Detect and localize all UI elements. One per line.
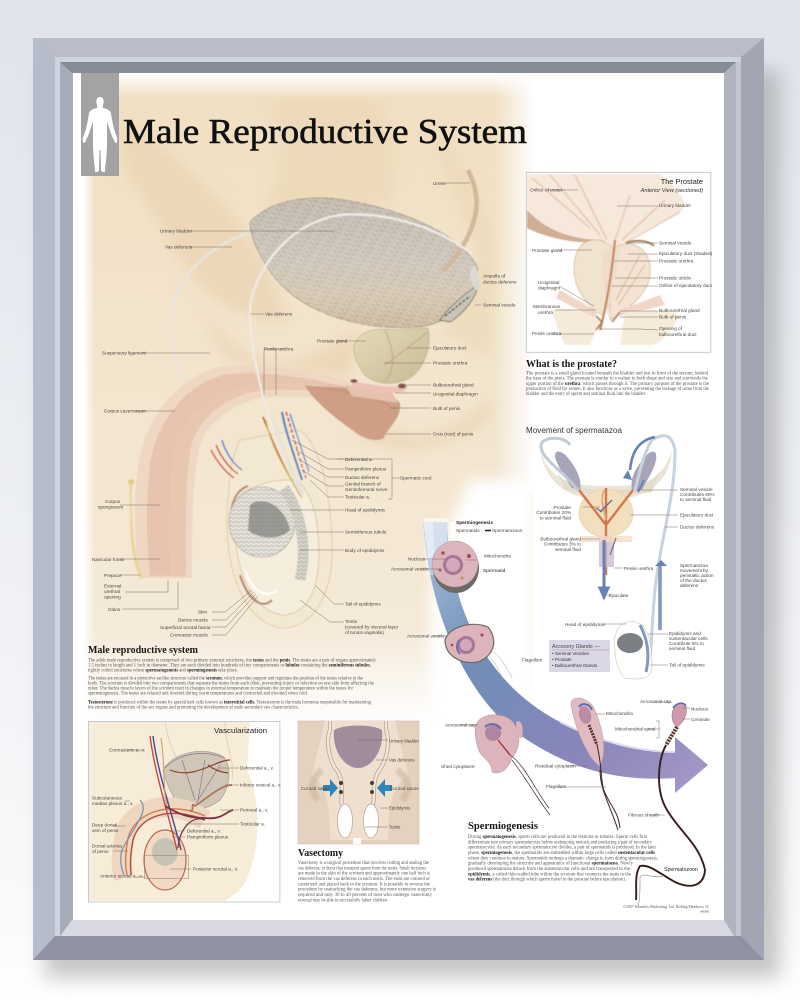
sperm cell labels: Residual cytoplasm bbox=[535, 764, 576, 768]
vascular labels bbox=[92, 726, 281, 878]
anatomy labels: Superficial scrotal fascia bbox=[160, 625, 211, 630]
text block: what is the prostate: the base of the penis. The prostate is similar to a walnut in both shape and size and surrounds the bbox=[526, 376, 708, 382]
prostate labels: Membranous bbox=[533, 304, 561, 309]
anatomy labels: Spermatic cord bbox=[400, 476, 432, 480]
text block: vasectomy: procedure by reattaching the vas deferens, but more extensive surgery is bbox=[298, 888, 436, 893]
vascular labels: Anterior scrotal a., v. bbox=[100, 874, 143, 878]
bulb of penis bbox=[305, 386, 400, 440]
panel: vasectomy diagram: Cut and suture bbox=[390, 786, 419, 791]
anatomy labels: (covered by visceral layer bbox=[345, 624, 399, 630]
movement labels: sustentacular cells bbox=[669, 636, 708, 641]
movement labels: to seminal fluid bbox=[540, 516, 571, 520]
callout: accessory glands: • Bulbourethral Glands bbox=[552, 663, 598, 668]
vascular labels: Perineal a., v. bbox=[240, 808, 268, 812]
movement labels: movement by bbox=[680, 568, 709, 573]
movement labels: Prostate bbox=[554, 505, 571, 510]
anatomy labels: Genitofemoral nerve bbox=[345, 487, 388, 492]
anatomy labels: Urogenital diaphragm bbox=[433, 392, 478, 396]
text block: vasectomy: removed from the vas deferens in each testis. The ends are cutured or bbox=[298, 877, 430, 882]
anatomy labels: Corpus bbox=[105, 499, 121, 504]
text block: spermiogenesis: During spermatogenesis, sperm cells are produced in the testicles or tubules. Sperm cells first bbox=[468, 835, 648, 840]
testis bbox=[615, 622, 652, 679]
prostate labels bbox=[530, 177, 713, 337]
prostate labels: bulbourethral duct bbox=[659, 332, 697, 337]
movement labels: Spermatozoa bbox=[680, 563, 708, 568]
testes bbox=[338, 804, 352, 838]
vasectomy labels bbox=[358, 740, 388, 827]
heading: spermiogenesis: Spermiogenesis bbox=[468, 820, 539, 832]
text block: male reproductive system: tightly coiled structures where spermatogenesis and spermiogenesis take place. bbox=[88, 668, 238, 674]
prostate gland bbox=[354, 328, 429, 383]
anatomy labels: Vas deferens bbox=[165, 244, 193, 250]
sperm cell labels: Spermatid bbox=[483, 568, 506, 574]
vascular labels: Posterior scrotal a., v. bbox=[193, 866, 238, 872]
arrow: spermiogenesis progression bbox=[423, 518, 708, 793]
anatomy labels: Cremaster muscle bbox=[170, 632, 208, 638]
credit: 96300 bbox=[701, 910, 709, 914]
text block: male reproductive system: Testosterone is produced within the testes by specialized cells known as interstitial cells. Testosterone is the male hormone responsible for maintaining bbox=[88, 700, 372, 706]
anatomy labels: Ureter bbox=[433, 181, 446, 186]
prostate labels: Orifice of ejaculatory duct bbox=[659, 283, 713, 288]
prostate labels: Urinary bladder bbox=[659, 203, 691, 208]
vascular labels: Cremasteric a., v. bbox=[109, 748, 145, 752]
anatomy labels: Ductus deferens bbox=[345, 475, 380, 480]
vas deferens crossing bladder bbox=[250, 214, 472, 462]
text block: what is the prostate: bladder and the entry of sperm and seminal fluid into the bladder. bbox=[526, 392, 646, 397]
prostate labels: Prostate gland bbox=[532, 248, 563, 253]
movement leader lines bbox=[582, 490, 678, 665]
text block: spermiogenesis: vas deferens (the duct through which sperm travel to the prostate before ejaculation). bbox=[468, 878, 626, 883]
urinary bladder bbox=[250, 198, 478, 328]
epididymis bbox=[284, 488, 303, 580]
text block: spermiogenesis bbox=[468, 835, 658, 883]
panel: vasectomy diagram: Urinary bladder bbox=[389, 738, 420, 744]
movement labels: Penile urethra bbox=[624, 566, 654, 571]
panel: vasectomy diagram: Testis bbox=[389, 824, 401, 830]
panel: vasectomy diagram: Vas deferens bbox=[389, 758, 415, 762]
ducts bbox=[579, 488, 633, 575]
urogenital diaphragm and bulbourethral gland bbox=[352, 381, 408, 393]
vascular labels: Vascularization bbox=[214, 726, 267, 735]
prostate labels: Orifice of ureter bbox=[530, 188, 563, 192]
movement labels: Head of epididymis bbox=[565, 622, 606, 627]
anatomy labels: Penile urethra bbox=[264, 346, 294, 352]
text block: vasectomy bbox=[298, 861, 436, 903]
text block: what is the prostate bbox=[526, 372, 709, 397]
panel: vasectomy diagram: Cut and suture bbox=[301, 786, 330, 791]
vascular labels: median plexus a., v. bbox=[92, 801, 133, 806]
anatomy labels: Tail of epididymis bbox=[345, 602, 381, 606]
prostate labels: Opening of bbox=[659, 326, 683, 331]
anatomy labels: Prepuce bbox=[104, 573, 122, 578]
prostate labels: The Prostate bbox=[661, 177, 703, 186]
movement labels: Tail of epididymis bbox=[669, 662, 705, 668]
seminal vesicle bbox=[440, 285, 478, 322]
anatomy labels: Dartos muscle bbox=[178, 618, 208, 622]
anatomy labels: Pampiniform plexus bbox=[345, 466, 387, 472]
text block: vasectomy: cauterized and placed back in the scrotum. It is possible to reverse the bbox=[298, 882, 430, 887]
scrotal sac bbox=[227, 430, 332, 628]
heading: what is the prostate: What is the prostate? bbox=[526, 359, 617, 370]
anatomy labels: Glans bbox=[108, 607, 121, 612]
seminal vesicles bbox=[555, 452, 580, 490]
text block: male reproductive system: other. The dartos muscle layers of the scrotum react to changes in external temperature to maintain the proper temperature within the testes for bbox=[88, 686, 353, 692]
movement labels: Contributes 60% bbox=[680, 492, 715, 497]
illustration: spermatid cell bbox=[432, 541, 479, 593]
panel: vasectomy diagram bbox=[298, 721, 420, 844]
text block: what is the prostate: upper portion of the urethra, which passes through it. The primary purpose of the prostate is the bbox=[526, 382, 709, 387]
panel: prostate bbox=[526, 172, 713, 352]
vascular labels: Deferential a., v. bbox=[240, 766, 274, 770]
movement labels: Bulbourethral gland bbox=[540, 536, 581, 542]
anatomy labels: Prostate gland bbox=[317, 338, 348, 344]
anatomy labels: spongiosum bbox=[98, 504, 123, 510]
text block: male reproductive system: The adult male reproductive system is comprised of two primary external structures, the testes and the penis. The testes are a pair of organs approximately bbox=[88, 658, 377, 664]
prostate bbox=[579, 489, 633, 537]
vas deferens left loop bbox=[170, 233, 248, 380]
movement labels: Contributes 20% bbox=[536, 510, 571, 515]
vascular labels: Subcutaneous bbox=[92, 796, 123, 800]
sperm cell labels: Acrosomal vesicle bbox=[391, 566, 429, 572]
text block: spermiogenesis: spermatocytes. As each secondary spermatocyte divides, a pair of spermatids is produced. In the later bbox=[468, 846, 656, 851]
anatomy labels: Vas deferens bbox=[265, 312, 293, 316]
sperm cell labels: Nucleus bbox=[408, 556, 426, 562]
sperm cell labels: Nucleus bbox=[691, 706, 709, 712]
movement labels: Ductus deferens bbox=[680, 524, 715, 530]
sperm cell labels bbox=[391, 520, 710, 873]
movement labels: seminal fluid bbox=[669, 646, 695, 651]
anatomy labels: Head of epididymis bbox=[345, 508, 386, 512]
vascular labels: of penis bbox=[92, 849, 109, 854]
prostate leader lines bbox=[548, 190, 658, 334]
heading: vasectomy: Vasectomy bbox=[298, 847, 343, 859]
illustration: elongating spermatid bbox=[571, 698, 620, 830]
text block: male reproductive system: the structure and function of the sex organs and promoting the development of male secondary sex characteristics. bbox=[88, 706, 299, 710]
sperm cell labels: Acrosomal vesicle bbox=[407, 634, 445, 638]
vascular labels: Dorsal arteries bbox=[92, 844, 123, 848]
vascular labels: Deep dorsal bbox=[92, 822, 117, 828]
anatomy labels: ductus deferens bbox=[483, 280, 517, 284]
vascular labels: Testicular a. bbox=[240, 822, 265, 826]
anatomy labels: Testicular a. bbox=[345, 494, 370, 500]
vascular labels: vein of penis bbox=[92, 828, 119, 833]
sperm cell labels: Spermatozoon bbox=[664, 867, 698, 873]
prostate labels: Prostatic urethra bbox=[659, 258, 694, 264]
text block: spermiogenesis: produced spermatozoa detach from the sustentacular cells and are transported to the bbox=[468, 867, 630, 872]
text block: spermiogenesis: gradually developing the structure and appearance of functional spermatozoa. Newly bbox=[468, 862, 634, 867]
illustration: maturing cell with shed cytoplasm bbox=[475, 715, 550, 815]
movement labels: Ejaculate bbox=[609, 593, 629, 598]
prostate labels: Penile urethra bbox=[532, 331, 562, 336]
prostate labels: Bulbourethral gland bbox=[659, 308, 700, 313]
urethra bbox=[131, 482, 142, 578]
movement labels: to seminal fluid bbox=[680, 497, 712, 502]
testis with tubules bbox=[229, 487, 295, 557]
anatomy labels bbox=[92, 181, 517, 638]
anatomy labels: opening bbox=[104, 594, 121, 600]
vascular shaft bbox=[122, 807, 205, 878]
anatomy labels: Ejaculatory duct bbox=[433, 346, 467, 350]
sperm cell labels: Mitochondria bbox=[484, 554, 511, 558]
movement labels: Contributes 3% to bbox=[544, 542, 581, 546]
text block: what is the prostate: The prostate is a small gland located beneath the bladder and just in front of the rectum, behind bbox=[526, 372, 709, 376]
anatomy labels: Seminiferous tubule bbox=[345, 530, 387, 534]
anatomy labels: Bulb of penis bbox=[433, 406, 461, 411]
illustration: cell with flagellum bbox=[445, 624, 512, 682]
prostate labels: Bulb of penis bbox=[659, 314, 687, 320]
bladder bbox=[334, 726, 382, 768]
poster sheet bbox=[73, 73, 724, 920]
prostate labels: Anterior View (sectioned) bbox=[640, 188, 703, 194]
anatomy labels: Corpus cavernosum bbox=[104, 408, 146, 414]
sperm cell labels: Shed cytoplasm bbox=[441, 764, 474, 769]
panel: vasectomy diagram: Epididymis bbox=[389, 806, 411, 810]
sperm cell labels: Centriole bbox=[691, 717, 710, 722]
text block: vasectomy: reversal may be able to successfully father children. bbox=[298, 898, 388, 903]
prostate labels: Prostatic utricle bbox=[659, 276, 691, 280]
vascular labels: Inferior vesical a., v. bbox=[240, 782, 281, 788]
ductus deferens tube bbox=[541, 438, 578, 490]
text block: male reproductive system: The testes are encased in a protective saclike structure called the scrotum, which provides support and regulates the position of the testes relative to the bbox=[88, 676, 363, 682]
anatomy labels: Skin bbox=[198, 610, 208, 614]
text block: male reproductive system: body. The scrotum is divided into two compartments that separate the testes from each other, preventing injury or infection on one side from affecting the bbox=[88, 682, 374, 686]
sperm cell labels: Flagellum bbox=[522, 658, 542, 662]
peristaltic arrow bbox=[658, 565, 662, 630]
panel: main anatomy illustration bbox=[128, 170, 482, 628]
credit: ©2007 Scientific Publishing, Ltd. Rolling Meadows, IL bbox=[623, 904, 710, 910]
ampulla of ductus deferens bbox=[468, 265, 482, 291]
sperm cell labels: Spermiogenesis bbox=[456, 520, 493, 526]
anatomy labels: External bbox=[104, 584, 121, 588]
prostate illustration bbox=[527, 174, 684, 345]
text block: vasectomy: are made in the skin of the scrotum and approximately one half inch is bbox=[298, 872, 430, 877]
prostate labels: urethra bbox=[538, 310, 553, 315]
text block: spermiogenesis: epididymis, a coiled thin-walled tube within the scrotum that connects the testis to the bbox=[468, 872, 631, 877]
vessels bbox=[150, 736, 177, 850]
movement labels: deferens bbox=[680, 583, 699, 588]
movement labels: of the ductus bbox=[680, 578, 707, 583]
anatomy labels: Bulbourethral gland bbox=[433, 382, 474, 388]
vascular leader lines bbox=[113, 750, 239, 877]
text block: male reproductive system: spermatogenesis. The testes are relaxed and lowered during warm temperatures and contracted and elevated when cold. bbox=[88, 692, 308, 696]
vascular labels: Deferential a., v. bbox=[187, 828, 221, 834]
title: Male Reproductive System bbox=[123, 112, 527, 151]
vascular labels: Pampiniform plexus bbox=[187, 834, 229, 840]
text block: spermiogenesis: differentiate into primary spermatocytes before undergoing meiosis and producing a pair of secondary bbox=[468, 840, 653, 845]
tab: figure icon bbox=[81, 73, 119, 176]
ejaculate arrow bbox=[600, 540, 608, 597]
text block: what is the prostate: production of fluid for semen. It also functions as a valve, preventing the leakage of urine from the bbox=[526, 387, 709, 392]
anatomy labels: of tunica vaginalis) bbox=[345, 630, 384, 635]
anatomy labels: Crus (root) of penis bbox=[433, 432, 474, 436]
vascular scrotum and scrotal box bbox=[144, 830, 186, 890]
chart: movement of spermatazoa diagram bbox=[536, 436, 715, 679]
spermatic cord vessels bbox=[211, 412, 309, 498]
sperm cell labels: Mitochondria bbox=[606, 711, 633, 716]
callout: accessory glands: • Prostate bbox=[552, 657, 572, 662]
credit bbox=[623, 904, 710, 914]
movement labels: seminal fluid bbox=[555, 547, 581, 552]
anatomy labels: Genital branch of bbox=[345, 482, 381, 486]
prostate labels: Seminal vesicle bbox=[659, 240, 692, 246]
cut points bbox=[339, 781, 343, 785]
ureter bbox=[443, 170, 477, 271]
penis shaft corpus bbox=[135, 365, 360, 578]
vas tubes bbox=[328, 721, 342, 806]
text block: vasectomy: vas deferens, or ducts that transport sperm from the testes. Small incisions bbox=[298, 866, 426, 871]
anatomy labels: Urinary bladder bbox=[160, 228, 192, 234]
sperm cell labels: Fibrous sheath bbox=[628, 812, 659, 818]
sperm cell labels: Acrosomal cap bbox=[640, 699, 671, 704]
prostate labels: Urogenital bbox=[538, 280, 559, 285]
anatomy labels: Testis bbox=[345, 619, 358, 624]
anatomy labels: urethral bbox=[104, 589, 120, 594]
anatomy labels: Navicular fossa bbox=[92, 557, 124, 562]
panel: vascularization bbox=[88, 721, 281, 902]
text block: spermiogenesis: where they continue to mature. Spermatids undergo a dramatic change in form during spermiogenesis, bbox=[468, 856, 658, 861]
scrotal wall layers bbox=[240, 575, 272, 604]
anatomy labels: Body of epididymis bbox=[345, 548, 385, 553]
text block: male reproductive system bbox=[88, 658, 377, 710]
penile urethra bbox=[599, 537, 614, 567]
bladder bowl bbox=[540, 450, 672, 500]
text block: vasectomy: Vasectomy is a surgical procedure that involves cutting and sealing the bbox=[298, 861, 429, 866]
text block: male reproductive system: 1.5 inches in length and 1 inch in diameter. They are each divided into hundreds of tiny compartments or lobules containing the seminiferous tubules, bbox=[88, 664, 371, 668]
anatomy labels: Prostatic urethra bbox=[433, 360, 468, 366]
movement labels: Epididymis and bbox=[669, 631, 701, 636]
text block: vasectomy: required and only 30 to 40 percent of men who undergo vasectomy bbox=[298, 893, 433, 898]
callout: accessory glands bbox=[549, 640, 610, 672]
movement labels: peristaltic action bbox=[680, 573, 714, 578]
movement labels: Ejaculatory duct bbox=[680, 512, 714, 518]
callout: accessory glands: Accesory Glands — bbox=[552, 644, 600, 650]
panel: body skin field bbox=[73, 73, 724, 726]
vascular bladder bbox=[163, 751, 229, 809]
prostate labels: diaphragm bbox=[538, 286, 560, 290]
callout: accessory glands: • Seminal Vesicles bbox=[552, 651, 590, 656]
sperm cell labels: Flagellum bbox=[546, 784, 566, 789]
movement labels: Seminal vesicle bbox=[680, 487, 713, 492]
sperm cell labels: Acrosomal cap bbox=[445, 722, 476, 728]
anatomy labels: Deferential a. bbox=[345, 457, 373, 462]
sperm cell labels: Spermatozoon bbox=[492, 528, 523, 533]
heading: male reproductive system: Male reproductive system bbox=[88, 644, 198, 656]
icon: cut arrows bbox=[323, 779, 338, 797]
anatomy labels: Ampulla of bbox=[483, 274, 506, 278]
anatomy labels: Seminal vesicle bbox=[483, 302, 516, 308]
text block: spermiogenesis: phase, spermiogenesis, the spermatids are embedded within large cells called sustentacular cells bbox=[468, 851, 655, 856]
body bbox=[312, 721, 408, 840]
heading: movement of spermatazoa: Movement of spermatazoa bbox=[526, 425, 622, 435]
anatomy labels: Suspensory ligament bbox=[102, 350, 146, 356]
sperm cell labels: Mitochondrial spiral bbox=[615, 726, 655, 732]
movement labels: Contribute 5% to bbox=[669, 641, 704, 646]
illustration: spermatozoon bbox=[636, 703, 705, 906]
prostate labels: Ejaculatory duct (shaded) bbox=[659, 251, 713, 256]
movement labels bbox=[536, 487, 715, 668]
sperm cell labels: Spermatids bbox=[456, 528, 480, 533]
